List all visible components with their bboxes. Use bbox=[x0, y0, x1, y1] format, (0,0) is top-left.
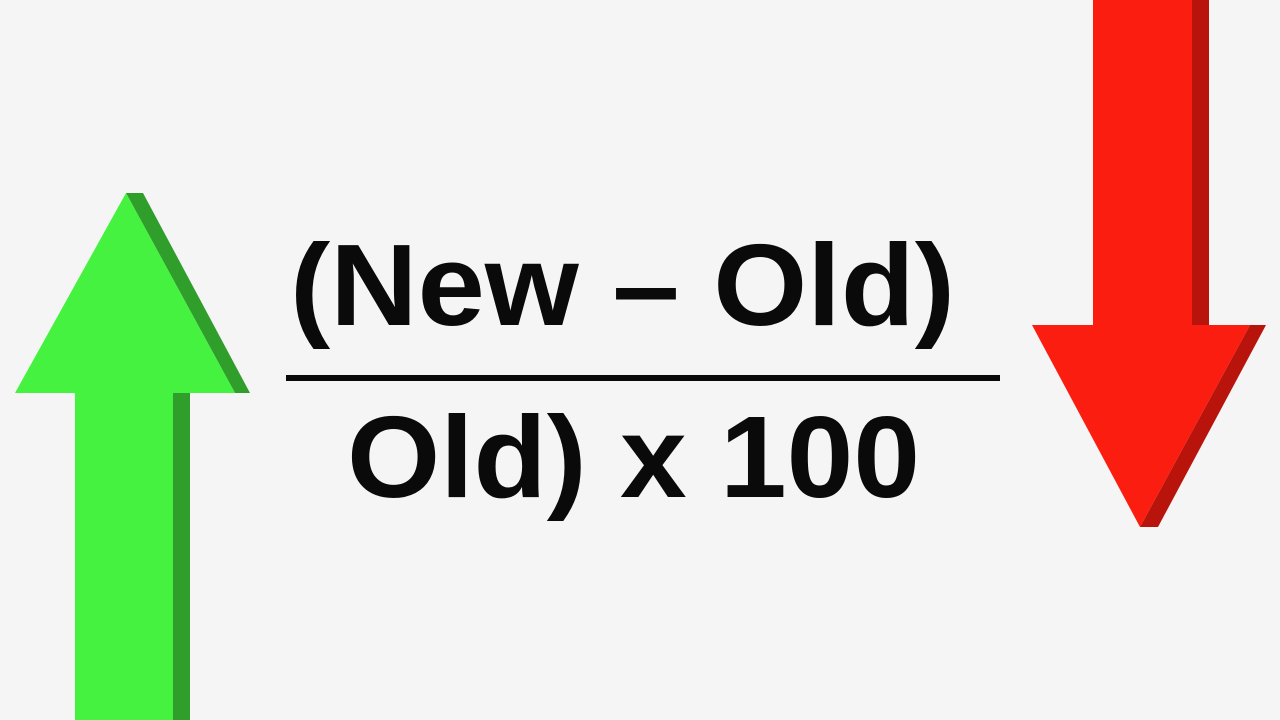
icon: green up arrow bbox=[15, 193, 250, 720]
formula numerator: (New – Old) bbox=[290, 220, 955, 350]
icon: red down arrow bbox=[1032, 0, 1266, 527]
formula denominator: Old) x 100 bbox=[347, 392, 920, 522]
fraction line bbox=[286, 375, 1000, 381]
